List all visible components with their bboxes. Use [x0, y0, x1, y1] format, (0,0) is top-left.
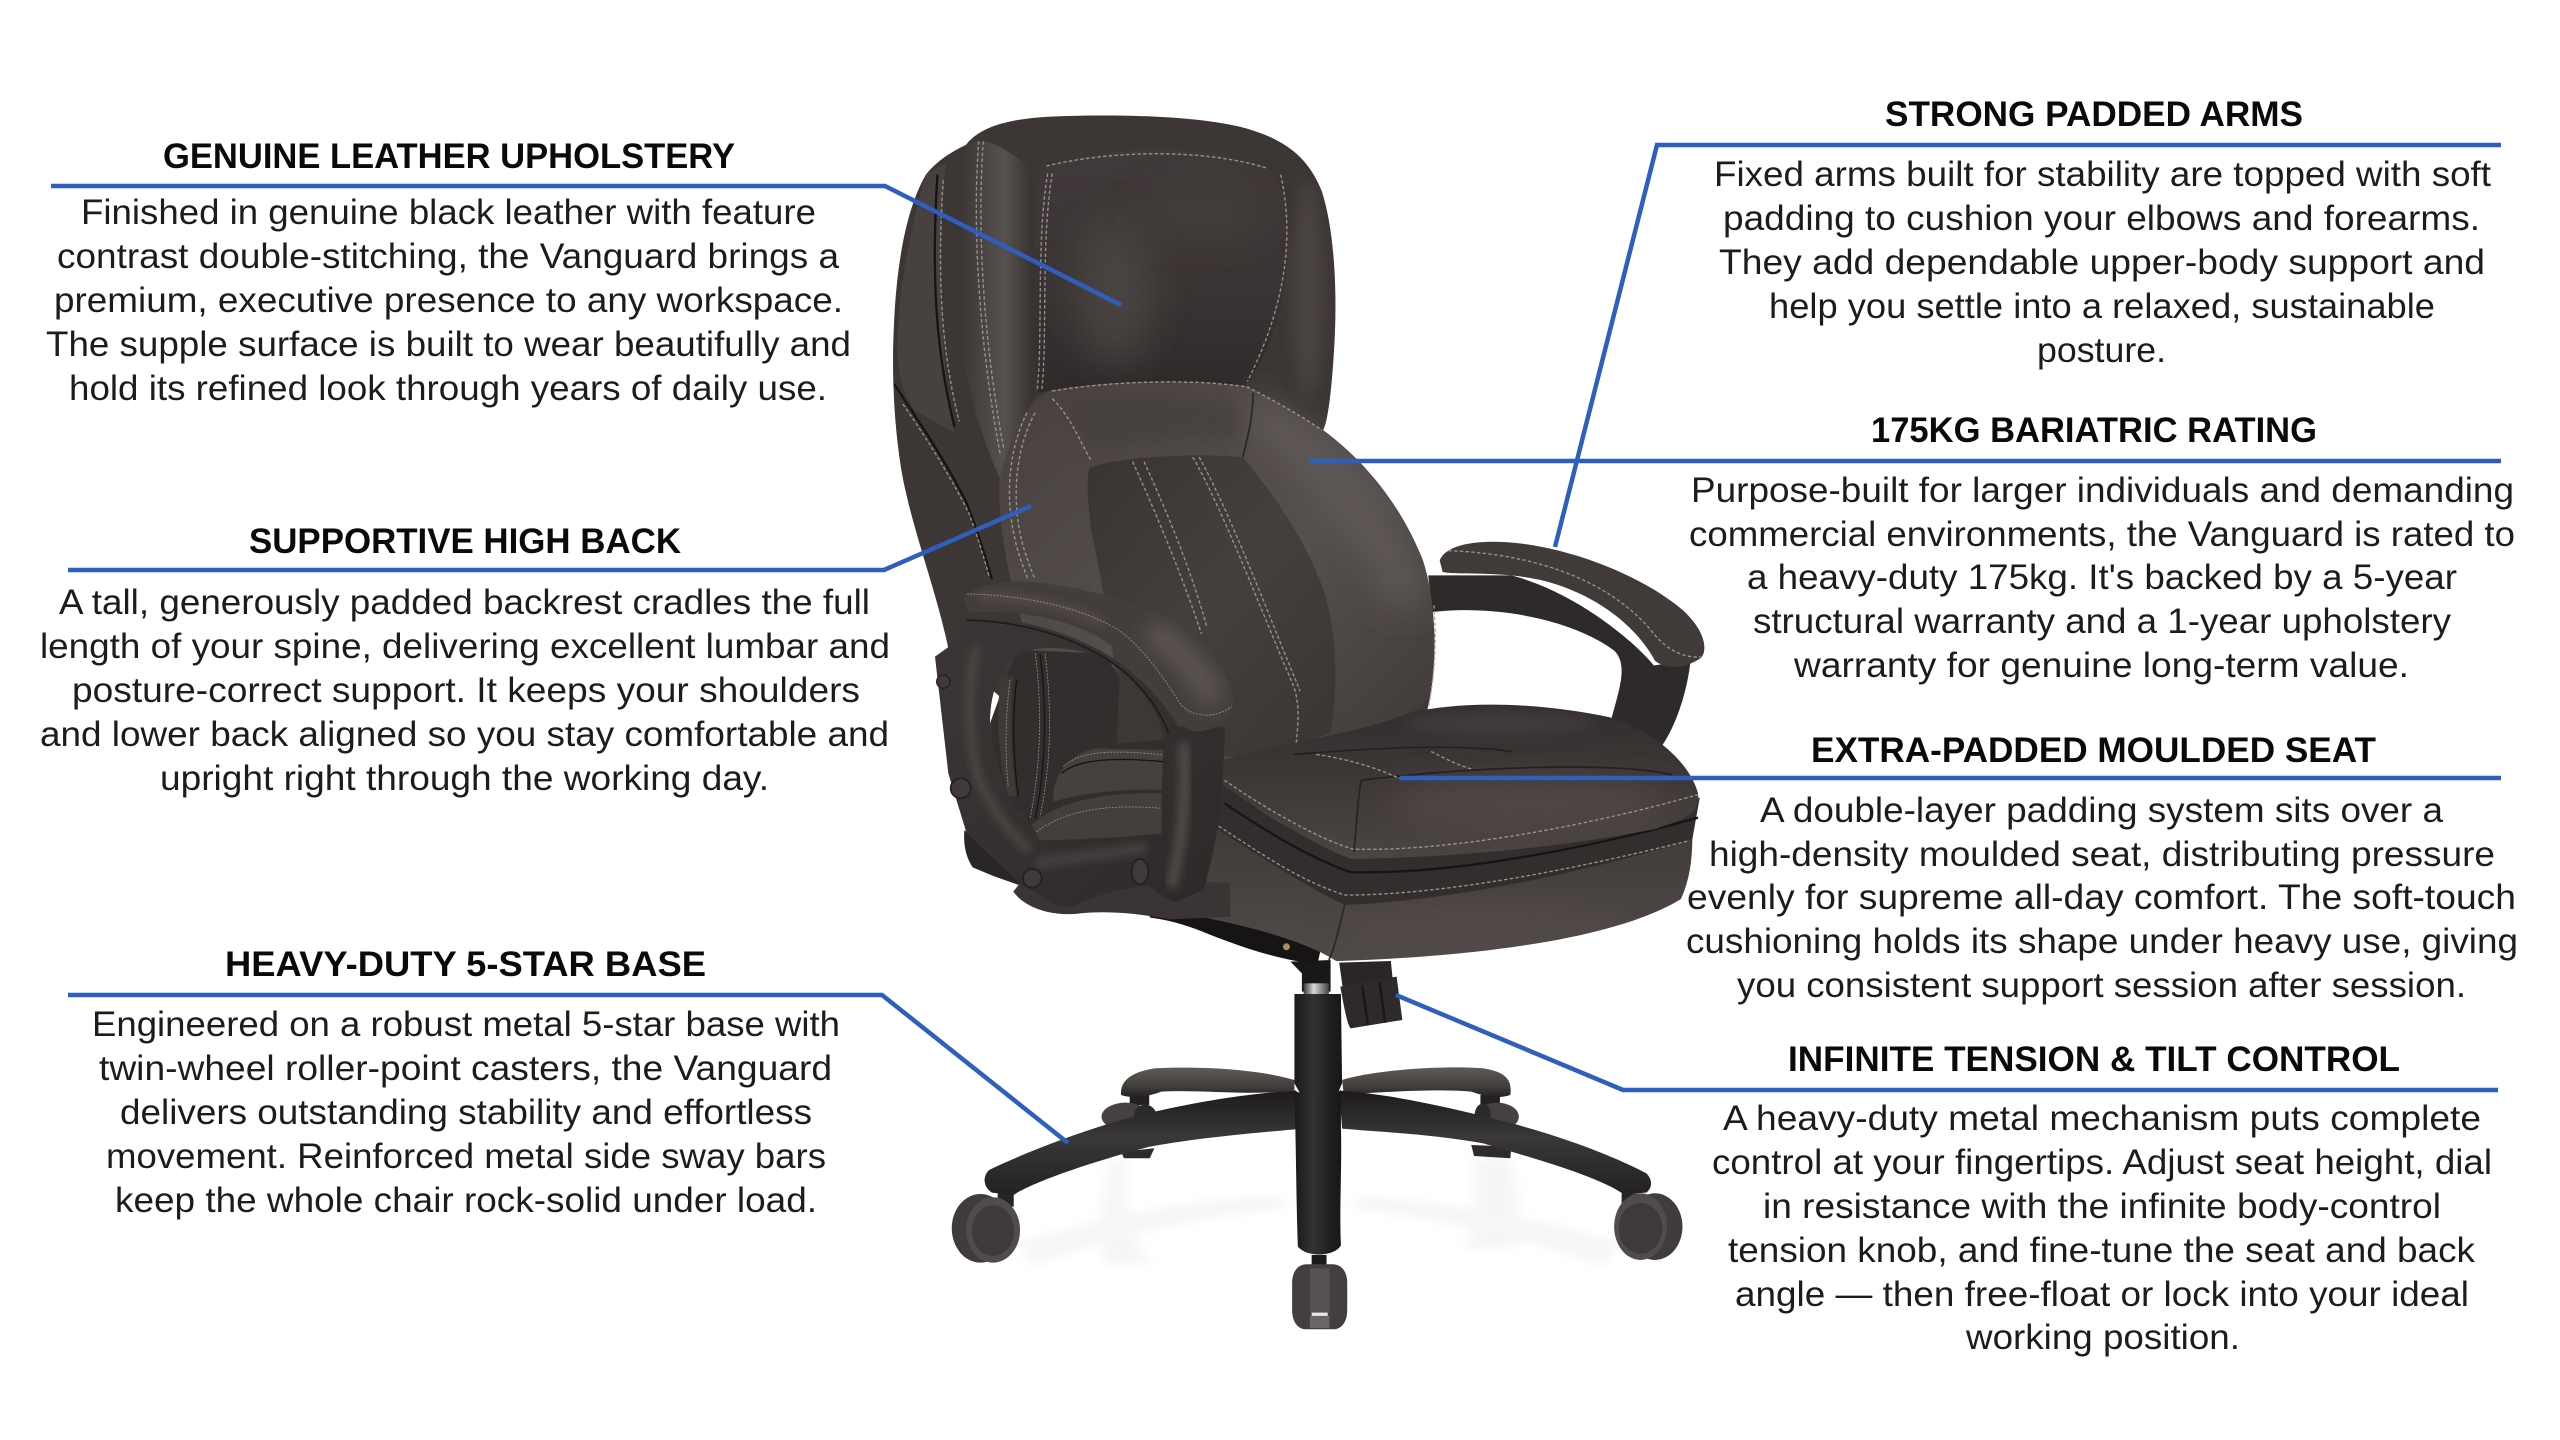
seat middle band — [1213, 780, 1700, 905]
heading: heavy-duty base: HEAVY-DUTY 5-STAR BASE — [225, 945, 706, 984]
chair base and casters — [952, 960, 1682, 1329]
seat lower body — [1205, 828, 1692, 962]
leader line to headrest — [51, 186, 1121, 305]
lumbar frame — [999, 382, 1435, 777]
back silhouette — [893, 116, 1434, 846]
body text: leather — [46, 193, 851, 408]
body text: arms: posture. — [2037, 331, 2166, 370]
body text: base: twin-wheel roller-point casters, the Vanguard — [99, 1049, 832, 1088]
front right caster — [1614, 1193, 1682, 1260]
body text: seat: A double-layer padding system sits over a — [1760, 791, 2444, 830]
body text: seat: cushioning holds its shape under heavy use, giving — [1686, 922, 2518, 961]
floor reflection shadow — [1018, 1157, 1620, 1267]
chair photo illustration — [893, 116, 1704, 1329]
leader line to arm — [1555, 145, 2501, 547]
body text: leather: hold its refined look through years of daily use. — [69, 369, 827, 408]
panel: strong padded arms — [1555, 95, 2501, 547]
near arm assembly — [935, 581, 1234, 919]
body text: rating — [1689, 471, 2515, 685]
body text: base: keep the whole chair rock-solid under load. — [115, 1181, 817, 1220]
body text: high back — [40, 583, 890, 798]
body text: leather: The supple surface is built to wear beautifully and — [46, 325, 851, 364]
body text: seat: high-density moulded seat, distributing pressure — [1709, 835, 2495, 874]
body text: rating: commercial environments, the Vanguard is rated to — [1689, 515, 2515, 554]
far arm support — [1428, 575, 1691, 746]
body text: leather: contrast double-stitching, the Vanguard brings a — [57, 237, 840, 276]
leader line to lumbar — [68, 506, 1031, 570]
seat mechanism underside — [1150, 901, 1322, 964]
body text: tension: in resistance with the infinite body-control — [1763, 1187, 2441, 1226]
body text: arms: padding to cushion your elbows and forearms. — [1723, 199, 2480, 238]
body text: rating: warranty for genuine long-term value. — [1793, 646, 2409, 685]
seat top cushion — [1219, 705, 1698, 859]
body text: base — [92, 1005, 840, 1220]
front left caster — [952, 1193, 1020, 1263]
body text: tension: A heavy-duty metal mechanism puts complete — [1723, 1099, 2481, 1138]
body text: rating: a heavy-duty 175kg. It's backed by a 5-year — [1747, 558, 2457, 597]
body text: leather: Finished in genuine black leather with feature — [81, 193, 816, 232]
body text: seat: you consistent support session after session. — [1737, 966, 2466, 1005]
body text: high back: posture-correct support. It keeps your shoulders — [72, 671, 860, 710]
body text: arms: Fixed arms built for stability are topped with soft — [1714, 155, 2491, 194]
heading: genuine leather upholstery: GENUINE LEATHER UPHOLSTERY — [163, 137, 735, 176]
body text: high back: and lower back aligned so you stay comfortable and — [40, 715, 889, 754]
heading: tension control: INFINITE TENSION & TILT CONTROL — [1788, 1040, 2400, 1079]
view through the arm opening — [990, 650, 1167, 842]
body text: tension: working position. — [1965, 1318, 2240, 1357]
far arm pad — [1440, 542, 1704, 667]
body text: high back: length of your spine, delivering excellent lumbar and — [40, 627, 890, 666]
body text: tension — [1712, 1099, 2492, 1357]
leader line to back — [1309, 459, 2501, 463]
body text: tension: control at your fingertips. Adjust seat height, dial — [1712, 1143, 2492, 1182]
panel: 175kg bariatric rating — [1309, 411, 2515, 685]
leader line to seat — [1400, 776, 2501, 780]
panel: infinite tension and tilt control — [1396, 995, 2498, 1357]
under tray — [1013, 870, 1230, 919]
lumbar centre panel — [1088, 455, 1335, 757]
panel: genuine leather upholstery — [46, 137, 1121, 408]
outer left side panel — [894, 163, 992, 579]
rear left caster — [1102, 1095, 1157, 1158]
body text: tension: tension knob, and fine-tune the seat and back — [1728, 1231, 2476, 1270]
body text: base: Engineered on a robust metal 5-star base with — [92, 1005, 840, 1044]
body text: leather: premium, executive presence to any workspace. — [54, 281, 843, 320]
near arm pad — [963, 581, 1234, 732]
gas lift column — [1294, 994, 1342, 1097]
body text: seat — [1686, 791, 2518, 1005]
leader line to base leg — [68, 995, 1068, 1143]
body text: seat: evenly for supreme all-day comfort. The soft-touch — [1687, 878, 2516, 917]
right front leg — [1339, 1091, 1651, 1194]
centre front leg — [1294, 1090, 1341, 1254]
body text: rating: structural warranty and a 1-year upholstery — [1753, 602, 2452, 641]
plastic arm frame — [935, 617, 1225, 907]
body text: arms — [1714, 155, 2491, 370]
chair upper: back, arms, seat — [893, 116, 1704, 964]
heading: moulded seat: EXTRA-PADDED MOULDED SEAT — [1811, 731, 2376, 770]
tension knob — [1339, 961, 1402, 1028]
body text: base: delivers outstanding stability and effortless — [120, 1093, 812, 1132]
panel: supportive high back — [40, 506, 1031, 798]
left front leg — [985, 1091, 1296, 1195]
heading: bariatric rating: 175KG BARIATRIC RATING — [1871, 411, 2317, 450]
headrest cushion — [1035, 150, 1288, 393]
body text: high back: A tall, generously padded backrest cradles the full — [59, 583, 870, 622]
leader line to knob — [1396, 995, 2498, 1090]
side wing — [956, 141, 1036, 479]
heading: supportive high back: SUPPORTIVE HIGH BACK — [249, 522, 681, 561]
rear star legs — [1121, 1067, 1511, 1097]
body text: tension: angle — then free-float or lock into your ideal — [1735, 1275, 2469, 1314]
body text: arms: help you settle into a relaxed, sustainable — [1769, 287, 2435, 326]
body text: rating: Purpose-built for larger individuals and demanding — [1691, 471, 2514, 510]
rear right caster — [1471, 1095, 1519, 1158]
front centre caster — [1292, 1255, 1347, 1329]
heading: strong padded arms: STRONG PADDED ARMS — [1885, 95, 2303, 134]
body text: arms: They add dependable upper-body support and — [1719, 243, 2485, 282]
body text: high back: upright right through the working day. — [160, 759, 769, 798]
frame bolts — [937, 675, 1148, 888]
rear bracket — [964, 830, 1028, 888]
body text: base: movement. Reinforced metal side sway bars — [106, 1137, 826, 1176]
panel: extra-padded moulded seat — [1400, 731, 2518, 1005]
right headrest shoulder highlight — [1294, 190, 1322, 388]
panel: heavy-duty 5-star base — [68, 945, 1068, 1220]
gas lift upper — [1290, 960, 1331, 994]
